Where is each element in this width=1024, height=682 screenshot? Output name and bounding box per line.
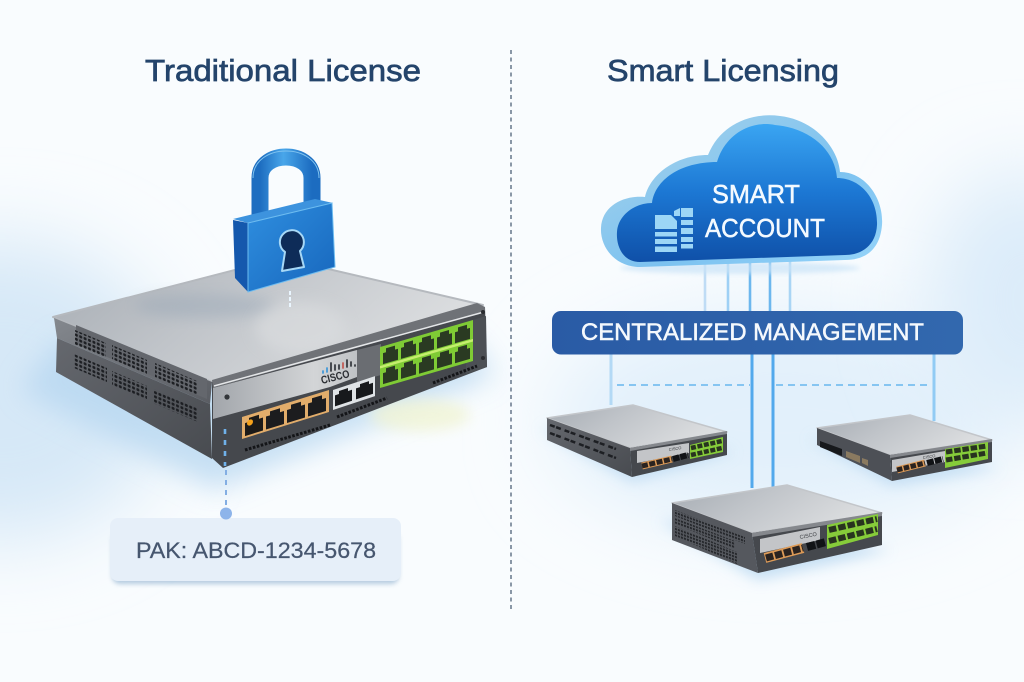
router bottom: CISCO [799,532,818,541]
icon: smart account cloud [601,115,882,274]
icon: smart account cloud: ACCOUNT [705,215,825,243]
centralized management bar [552,311,963,354]
cloud connectors [705,258,790,311]
router right: CISCO [922,453,936,460]
pak card: PAK: ABCD-1234-5678 [136,538,376,563]
connector: router to pak [225,470,227,510]
main router [20,258,495,490]
connector: lock to router [289,291,291,307]
connectors to routers [611,354,934,488]
cisco logo: CISCO [320,368,351,387]
icon: padlock [233,151,335,292]
router left [540,405,735,482]
router bottom [660,485,890,580]
pak card [110,508,401,584]
icon: document stack [655,208,693,252]
router right [808,415,1000,486]
green ports [380,320,473,388]
title: smart licensing: Smart Licensing [607,53,839,88]
white ports [333,376,375,410]
icon: smart account cloud: SMART [712,181,800,209]
router left: CISCO [668,445,682,452]
orange ports [242,390,329,439]
centralized management bar: CENTRALIZED MANAGEMENT [581,319,924,346]
title: traditional license: Traditional License [145,53,421,88]
divider [510,50,512,610]
keyhole [280,230,304,271]
